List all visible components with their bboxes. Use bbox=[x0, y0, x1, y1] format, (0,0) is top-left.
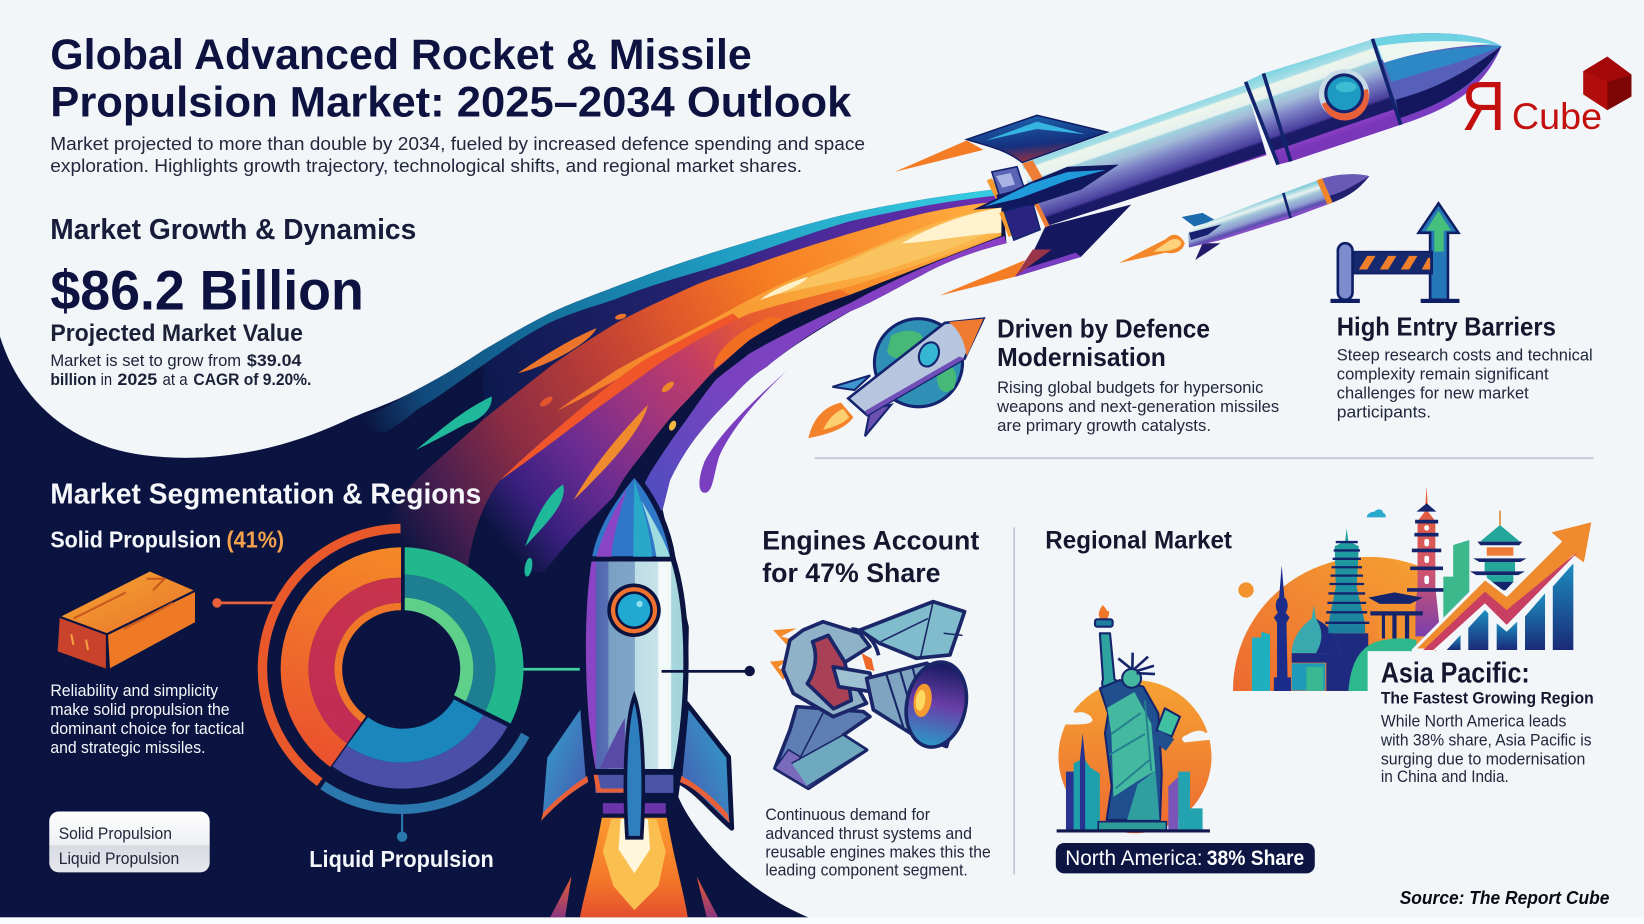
rocket window bbox=[607, 583, 661, 637]
icon: main rocket bbox=[894, 33, 1501, 296]
stat description bbox=[50, 351, 311, 389]
swoosh: navy trail background bbox=[0, 189, 1007, 917]
missile fins bbox=[1182, 213, 1215, 226]
pedestal bbox=[1098, 822, 1166, 830]
stat description: $39.04 bbox=[247, 351, 302, 370]
rocket fin spikes bbox=[894, 140, 1025, 296]
rocket upper fin bbox=[967, 115, 1107, 163]
temple bbox=[1368, 592, 1423, 639]
rocket centre fin bbox=[625, 696, 643, 838]
logo: RCube bbox=[1462, 57, 1631, 145]
stat description: in bbox=[101, 370, 112, 389]
connector: brick to donut bbox=[212, 598, 276, 608]
text block: solid propulsion description: and strategic missiles. bbox=[50, 739, 206, 757]
connector: rocket to engine bbox=[662, 666, 755, 676]
text block: engines description: leading component segment. bbox=[765, 861, 968, 879]
logo mark Я: Я bbox=[1462, 67, 1506, 145]
engine body bbox=[783, 622, 879, 717]
text block: asia pacific: surging due to modernisation bbox=[1381, 750, 1585, 768]
stat description: Market is set to grow from bbox=[50, 351, 241, 370]
icon: solid fuel brick bbox=[57, 570, 196, 670]
subtitle: Market projected to more than double by 2034, fueled by increased defence spending and space bbox=[50, 133, 865, 154]
sun disc bbox=[1048, 680, 1216, 833]
text block: engines description: Continuous demand for bbox=[765, 806, 931, 824]
segment: solid propulsion bbox=[281, 547, 401, 767]
logo cube bbox=[1583, 57, 1631, 110]
icon: small missile bbox=[1119, 174, 1369, 263]
badge: north america share bbox=[1056, 843, 1315, 873]
rocket nose bbox=[1372, 33, 1501, 125]
donut chart bbox=[262, 528, 525, 809]
text block: engines heading: Engines Account bbox=[762, 524, 979, 555]
ground line bbox=[1057, 829, 1210, 832]
text block: asia pacific: While North America leads bbox=[1381, 713, 1566, 731]
growth arrow bbox=[1413, 520, 1593, 650]
sun dot bbox=[1238, 582, 1254, 598]
rocket body bbox=[583, 559, 686, 772]
rocket window bbox=[1319, 69, 1375, 127]
missile nose bbox=[1317, 174, 1369, 204]
text block: solid propulsion description: Reliability and simplicity bbox=[50, 682, 219, 700]
outer arc: orange bbox=[262, 528, 401, 782]
stat label: Projected Market Value bbox=[50, 320, 303, 347]
icon: rocket engine bbox=[770, 602, 974, 788]
text block: asia pacific: with 38% share, Asia Pacific is bbox=[1380, 731, 1592, 749]
rocket seams bbox=[1246, 39, 1401, 165]
rocket right fin bbox=[679, 704, 732, 828]
connector: donut to label bbox=[397, 810, 407, 842]
title: Propulsion Market: 2025–2034 Outlook bbox=[50, 78, 851, 126]
icon: asia pacific skyline bbox=[1233, 486, 1604, 692]
text block: asia pacific bbox=[1380, 657, 1594, 786]
statue bbox=[1095, 605, 1180, 820]
legend: Liquid Propulsion bbox=[59, 850, 179, 868]
rocket nose bbox=[589, 474, 673, 559]
text block: engines heading: for 47% Share bbox=[762, 557, 940, 588]
source credit: Source: The Report Cube bbox=[1400, 887, 1609, 908]
subtitle bbox=[50, 133, 865, 176]
text block: asia pacific: in China and India. bbox=[1381, 768, 1509, 786]
text block: high entry barriers: Steep research costs and technical bbox=[1337, 346, 1593, 365]
subtitle: exploration. Highlights growth trajectory, technological shifts, and regional market shares. bbox=[50, 155, 802, 176]
missile flame bbox=[1119, 235, 1185, 263]
tower: red bbox=[1407, 486, 1446, 636]
text block: defence modernisation: Driven by Defence bbox=[997, 314, 1210, 344]
sun arc bbox=[1233, 557, 1438, 691]
text block: high entry barriers: challenges for new market bbox=[1337, 383, 1529, 402]
label: solid propulsion share: (41%) bbox=[226, 526, 284, 552]
title: Global Advanced Rocket & Missile bbox=[50, 31, 752, 79]
text block: defence modernisation: Modernisation bbox=[997, 342, 1166, 372]
logo wordmark: Cube bbox=[1512, 96, 1602, 137]
text block: high entry barriers: High Entry Barriers bbox=[1337, 312, 1556, 342]
pagoda: teal bbox=[1325, 528, 1369, 633]
text block: solid propulsion description: make solid propulsion the bbox=[50, 701, 230, 719]
teal building bbox=[1252, 632, 1270, 691]
panel cutout bbox=[1368, 651, 1604, 692]
text block: defence modernisation: Rising global budgets for hypersonic bbox=[997, 378, 1263, 397]
dome bbox=[1292, 605, 1340, 691]
rocket body bbox=[1022, 85, 1267, 226]
title bbox=[50, 31, 851, 126]
rocket forward section bbox=[1263, 39, 1401, 161]
navy base bbox=[1326, 633, 1368, 691]
growth bars bbox=[1447, 563, 1573, 650]
icon: barrier with arrow bbox=[1331, 203, 1459, 303]
text block: asia pacific: Asia Pacific: bbox=[1381, 657, 1530, 689]
heading: market growth: Market Growth & Dynamics bbox=[50, 213, 416, 245]
stat number: $86.2 Billion bbox=[50, 259, 364, 321]
rocket left fin bbox=[540, 704, 588, 823]
skyline bbox=[1066, 733, 1203, 830]
heading: regional market: Regional Market bbox=[1045, 526, 1233, 554]
rocket front fin bbox=[973, 165, 1119, 210]
connector: donut to rocket bbox=[523, 668, 580, 671]
rocket flame bbox=[550, 818, 718, 917]
stat: market value bbox=[50, 259, 364, 389]
green mound bbox=[1348, 638, 1416, 691]
text block: high entry barriers: participants. bbox=[1337, 402, 1431, 421]
segment: liquid propulsion green bbox=[405, 547, 524, 723]
icon: rocket with globe bbox=[808, 319, 983, 438]
legend: Solid Propulsion bbox=[59, 825, 172, 843]
badge: north america share: North America: bbox=[1065, 847, 1203, 870]
rocket lower fin bbox=[1015, 204, 1131, 277]
rocket base collar bbox=[593, 772, 675, 815]
stat description: billion bbox=[50, 370, 96, 389]
engine upper wing bbox=[860, 602, 965, 658]
text block: engines description bbox=[765, 806, 991, 879]
label: liquid propulsion: Liquid Propulsion bbox=[309, 846, 494, 872]
stat description: at a bbox=[163, 370, 188, 389]
stat description: 2025 bbox=[117, 370, 157, 389]
text block: asia pacific: The Fastest Growing Region bbox=[1381, 689, 1594, 708]
pagoda: green bbox=[1470, 511, 1527, 590]
text block: defence modernisation: are primary growth catalysts. bbox=[997, 416, 1211, 435]
text block: high entry barriers: complexity remain significant bbox=[1337, 365, 1549, 384]
badge: north america share: 38% Share bbox=[1207, 847, 1304, 870]
text block: solid propulsion description bbox=[50, 682, 244, 757]
engine lower wing bbox=[775, 707, 870, 788]
rocket tail blocks bbox=[987, 167, 1040, 240]
cloud bbox=[1367, 509, 1386, 517]
spire tower bbox=[1274, 565, 1291, 691]
text block: defence modernisation: weapons and next-generation missiles bbox=[996, 397, 1279, 416]
text block: engines description: reusable engines makes this the bbox=[765, 844, 991, 862]
text block: defence modernisation bbox=[996, 314, 1279, 435]
heading: segmentation: Market Segmentation & Regions bbox=[50, 477, 481, 509]
rocket ring bbox=[1246, 73, 1291, 165]
text block: solid propulsion description: dominant choice for tactical bbox=[50, 720, 244, 738]
segment: other blue bbox=[332, 699, 507, 789]
label: solid propulsion share: Solid Propulsion bbox=[50, 526, 221, 552]
legend bbox=[49, 812, 210, 872]
text block: high entry barriers bbox=[1337, 312, 1593, 421]
icon: large upright rocket bbox=[540, 474, 755, 917]
engine bell bbox=[867, 656, 974, 753]
outer arc: blue bbox=[323, 735, 525, 809]
green building bbox=[1443, 540, 1469, 619]
text block: engines description: advanced thrust systems and bbox=[765, 825, 972, 843]
stat description: CAGR of 9.20%. bbox=[193, 370, 311, 389]
missile body bbox=[1188, 180, 1327, 247]
icon: statue of liberty bbox=[1048, 605, 1216, 833]
text block: engines heading bbox=[762, 524, 979, 588]
